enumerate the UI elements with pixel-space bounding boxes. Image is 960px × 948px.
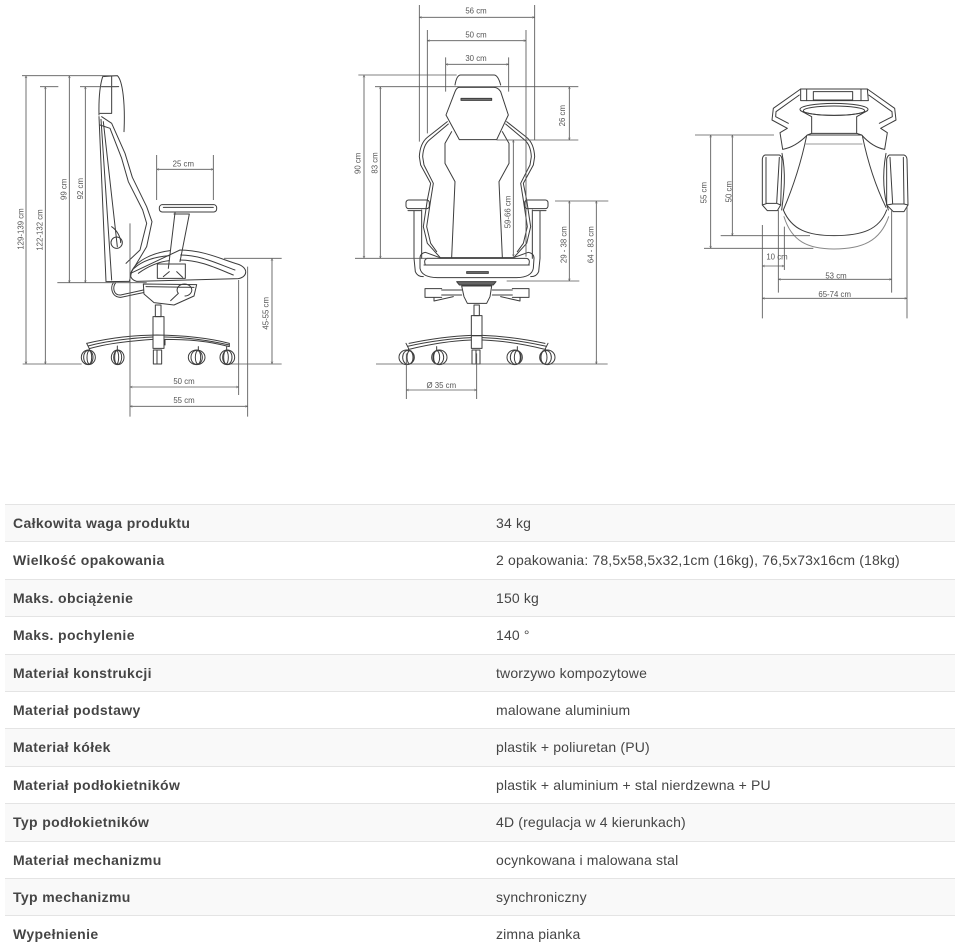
row: armrest type: Typ podłokietników (13, 814, 149, 830)
top dimension lines (695, 135, 907, 318)
top dimension labels: 65-74 cm (818, 290, 851, 299)
front view figure (354, 5, 608, 399)
row: caster material (5, 728, 955, 766)
side chair outline (81, 76, 246, 365)
front dimension labels: 59-66 cm (504, 196, 513, 228)
top dimension labels: 55 cm (699, 182, 708, 203)
front dimension labels: 50 cm (465, 30, 487, 39)
top dimension labels: 53 cm (825, 271, 847, 280)
row: mechanism type: synchroniczny (496, 889, 587, 905)
row: total weight: 34 kg (496, 515, 531, 531)
row: filling: Wypełnienie (13, 926, 98, 942)
row: mechanism material: ocynkowana i malowana stal (496, 852, 678, 868)
front dimension labels (354, 6, 596, 390)
row: package size: 2 opakowania: 78,5x58,5x32,1cm (16kg), 76,5x73x16cm (18kg) (496, 552, 900, 568)
front dimension labels: 26 cm (558, 105, 567, 126)
technical drawings (16, 5, 908, 417)
row: max tilt (5, 616, 955, 654)
row: total weight (5, 504, 955, 541)
top view figure (695, 89, 908, 318)
specification table (5, 504, 955, 942)
top dimension labels (699, 181, 851, 299)
front dimension lines (355, 5, 608, 399)
row: mechanism material: Materiał mechanizmu (13, 852, 162, 868)
front dimension labels: 30 cm (465, 54, 487, 63)
row: armrest type (5, 803, 955, 841)
side dimension labels: 99 cm (59, 179, 68, 200)
row: frame material: tworzywo kompozytowe (496, 665, 647, 681)
side dimension labels (16, 159, 270, 405)
row: max load: Maks. obciążenie (13, 590, 133, 606)
row: armrest material: Materiał podłokietników (13, 777, 180, 793)
side dimension labels: 122-132 cm (35, 209, 44, 251)
side dimension labels: 92 cm (76, 178, 85, 199)
side dimension lines (22, 76, 282, 417)
side dimension labels: 50 cm (173, 377, 195, 386)
row: frame material (5, 654, 955, 691)
front dimension labels: 83 cm (371, 152, 380, 174)
row: total weight: Całkowita waga produktu (13, 515, 190, 531)
front dimension labels: 29 - 38 cm (559, 226, 568, 263)
row: caster material: Materiał kółek (13, 739, 111, 755)
row: base material: Materiał podstawy (13, 702, 141, 718)
row: base material (5, 691, 955, 728)
row: armrest type: 4D (regulacja w 4 kierunkach) (496, 814, 686, 830)
row: max tilt: Maks. pochylenie (13, 627, 135, 643)
front dimension labels: 56 cm (465, 6, 487, 15)
row: max tilt: 140 ° (496, 627, 530, 643)
side dimension labels: 129-139 cm (16, 208, 25, 250)
row: package size (5, 541, 955, 579)
front dimension labels: 64 - 83 cm (587, 226, 596, 263)
row: max load: 150 kg (496, 590, 539, 606)
front chair outline (399, 75, 555, 365)
row: armrest material (5, 766, 955, 803)
side dimension labels: 55 cm (173, 396, 195, 405)
front dimension labels: Ø 35 cm (427, 381, 456, 390)
top dimension labels: 50 cm (724, 181, 733, 202)
side dimension labels: 25 cm (173, 159, 194, 168)
row: mechanism type: Typ mechanizmu (13, 889, 131, 905)
row: caster material: plastik + poliuretan (PU) (496, 739, 650, 755)
row: filling: zimna pianka (496, 926, 580, 942)
side view figure (16, 76, 282, 417)
row: base material: malowane aluminium (496, 702, 630, 718)
row: package size: Wielkość opakowania (13, 552, 165, 568)
row: mechanism material (5, 841, 955, 878)
top dimension labels: 10 cm (766, 252, 788, 261)
row: max load (5, 579, 955, 616)
row: armrest material: plastik + aluminium + stal nierdzewna + PU (496, 777, 771, 793)
row: filling (5, 915, 955, 948)
row: frame material: Materiał konstrukcji (13, 665, 152, 681)
side dimension labels: 45-55 cm (261, 297, 270, 330)
top chair outline (762, 89, 908, 249)
row: mechanism type (5, 878, 955, 915)
front dimension labels: 90 cm (354, 153, 363, 174)
